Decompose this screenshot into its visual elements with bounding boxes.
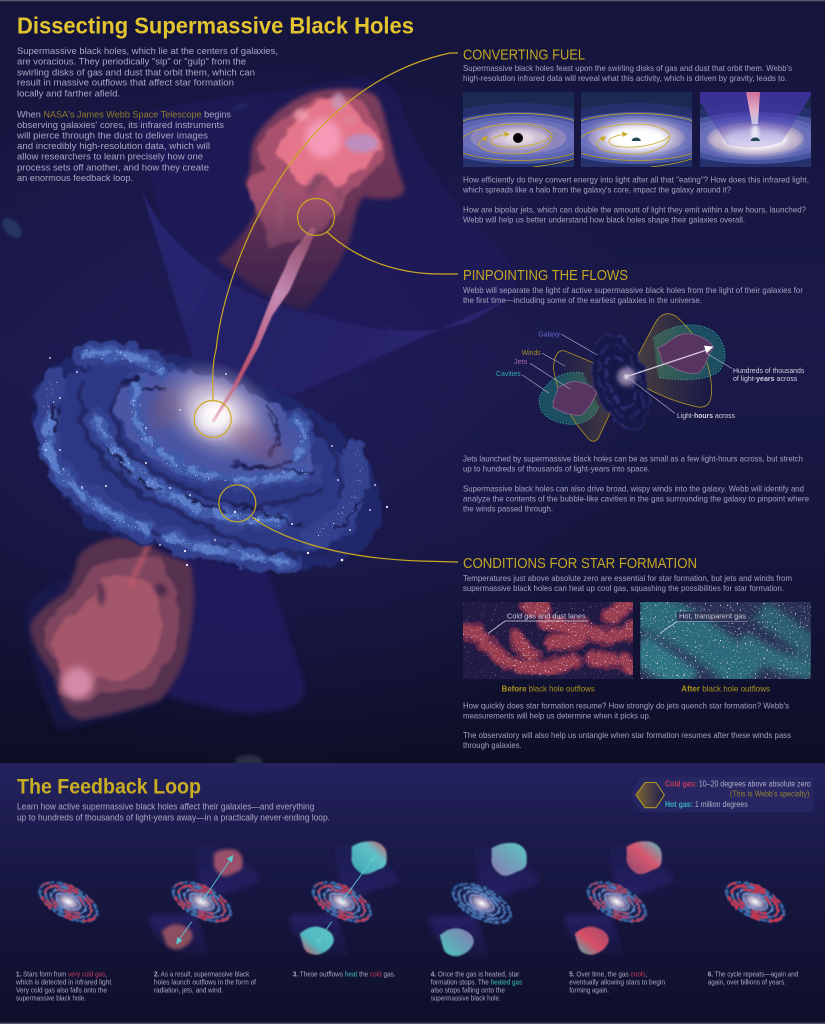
galaxy bbox=[581, 328, 660, 436]
diagram labels: Galaxy bbox=[538, 330, 560, 338]
image: before outflows bbox=[463, 602, 633, 679]
galaxy outer disk bbox=[32, 348, 382, 571]
intro text: When NASA's James Webb Space Telescope begins bbox=[17, 109, 231, 119]
caption: step 6: 6. The cycle repeats—again and bbox=[708, 970, 798, 979]
diagram labels: Cavities bbox=[496, 369, 521, 378]
text: pinpointing explanation: Supermassive black holes can also drive broad, wispy winds into the galaxy. Webb will identify and bbox=[463, 483, 804, 493]
panel: top outflow cavity bbox=[135, 78, 515, 419]
top jet bbox=[212, 226, 316, 422]
text: converting fuel intro: Supermassive black holes feast upon the swirling disks of gas and dust that orbit them. Webb's bbox=[463, 63, 792, 73]
text: pinpointing explanation: the winds passed through. bbox=[463, 503, 553, 513]
caption: step 5 bbox=[569, 970, 665, 994]
text: feedback intro bbox=[17, 802, 330, 822]
intro text: swirling disks of gas and dust that orbit them, which can bbox=[17, 67, 255, 77]
diagram labels: of light-years across bbox=[733, 374, 798, 383]
caption: step 1: supermassive black hole. bbox=[16, 994, 86, 1003]
arrow: size of jets bbox=[627, 346, 713, 377]
text: pinpointing intro: Webb will separate the light of active supermassive black holes from the light of their galaxies for bbox=[463, 285, 803, 295]
winds bbox=[553, 314, 712, 441]
caption: step 6 bbox=[708, 970, 798, 987]
text: pinpointing intro: the first time—including some of the earliest galaxies in the universe. bbox=[463, 295, 702, 305]
text: conditions questions: The observatory will also help us untangle when star formation resumes after these winds pass bbox=[463, 730, 791, 740]
text: pinpointing intro bbox=[463, 285, 803, 305]
step 1 galaxy bbox=[31, 872, 106, 932]
intro text: locally and farther afield. bbox=[17, 88, 120, 98]
text: conditions questions: How quickly does star formation resume? How strongly do jets quench star formation? Webb's bbox=[463, 700, 789, 710]
caption: step 4: also stops falling onto the bbox=[431, 985, 505, 994]
diagram labels: Hundreds of thousands bbox=[733, 366, 805, 375]
icon: hexagon bbox=[636, 782, 664, 808]
connector: pinpointing the flows bbox=[327, 232, 458, 274]
image: after outflows bbox=[637, 602, 814, 683]
caption: step 5: eventually allowing stars to begin bbox=[569, 978, 665, 987]
text: feedback intro: up to hundreds of thousands of light-years away—in a practically never-ending loop. bbox=[17, 812, 330, 822]
image: accretion disk bright bbox=[581, 92, 692, 167]
image: accretion disk dark bbox=[463, 92, 574, 167]
main galaxy bbox=[30, 340, 388, 574]
caption: step 6: again, over billions of years. bbox=[708, 978, 786, 987]
caption: step 1: which is detected in infrared light. bbox=[15, 978, 113, 987]
caption: step 4: supermassive black hole. bbox=[431, 994, 501, 1003]
caption: step 1 bbox=[15, 970, 113, 1003]
icon: distant small galaxies bbox=[0, 101, 395, 767]
label: hot transparent gas bbox=[660, 611, 748, 633]
diagram labels: Winds bbox=[522, 348, 541, 357]
diagram: jets, winds and cavities bbox=[496, 314, 805, 441]
text: conditions questions bbox=[463, 700, 791, 750]
caption: step 4 bbox=[431, 970, 523, 1003]
text: converting fuel questions bbox=[462, 175, 809, 224]
text: converting fuel questions: Webb will help us better understand how black holes shape their galaxies overall. bbox=[463, 214, 745, 224]
intro text: an enormous feedback loop. bbox=[17, 173, 133, 183]
legend: gas temperatures: Hot gas: 1 million degrees bbox=[665, 799, 748, 809]
caption: before: Before black hole outflows bbox=[502, 684, 595, 693]
text: converting fuel questions: How are bipolar jets, which can double the amount of light they emit within a few hours, launched? bbox=[463, 204, 806, 214]
step 6 cycle repeats bbox=[717, 872, 793, 932]
intro text: Supermassive black holes, which lie at the centers of galaxies, bbox=[17, 46, 278, 56]
heading: converting fuel: CONVERTING FUEL bbox=[463, 46, 585, 64]
legend: gas temperatures: (This is Webb's specialty) bbox=[730, 788, 809, 798]
image: accretion disk with jet bbox=[700, 92, 811, 167]
label: hot transparent gas: Hot, transparent gas bbox=[679, 611, 746, 620]
cavities bbox=[539, 325, 725, 424]
intro text: result in massive outflows that affect star formation bbox=[17, 78, 234, 88]
intro text: and incredibly high-resolution data, which will bbox=[17, 141, 210, 151]
caption: after: After black hole outflows bbox=[681, 684, 770, 693]
galaxy mid disk bbox=[43, 361, 360, 556]
caption: step 5: forming again. bbox=[569, 985, 609, 994]
label lines bbox=[522, 334, 732, 413]
jets bbox=[553, 334, 713, 415]
text: pinpointing explanation: up to hundreds of thousands of light-years into space. bbox=[463, 464, 650, 474]
text: conditions questions: measurements will help us determine when it picks up. bbox=[463, 710, 651, 720]
text: pinpointing explanation bbox=[463, 454, 809, 513]
text: converting fuel intro: high-resolution infrared data will reveal what this activity, which is driven by gravity, leads to. bbox=[463, 73, 787, 83]
intro text: allow researchers to learn precisely how one bbox=[17, 152, 203, 162]
panel: bottom outflow cone bbox=[120, 545, 305, 713]
text: conditions intro: Temperatures just above absolute zero are essential for star formation, but jets and winds from bbox=[463, 573, 792, 583]
text: feedback intro: Learn how active supermassive black holes affect their galaxies—and everything bbox=[17, 802, 314, 812]
bottom gas cloud bbox=[30, 533, 194, 720]
caption: step 2: radiation, jets, and wind. bbox=[154, 985, 223, 994]
intro text: process sets off another, and how they create bbox=[17, 162, 209, 172]
top gas cloud bbox=[217, 88, 405, 310]
text: pinpointing explanation: analyze the contents of the bubble-like cavities in the gas surrounding the galaxy to pinpoint where bbox=[463, 493, 809, 503]
title: Dissecting Supermassive Black Holes bbox=[17, 12, 414, 38]
galaxy star speckle bbox=[42, 348, 362, 569]
step 3 heating bbox=[290, 841, 400, 956]
step 2 outflows bbox=[150, 844, 260, 956]
galaxy dark lanes bbox=[81, 383, 340, 554]
panel: top outflow cone bbox=[140, 185, 512, 419]
connector: conditions for star formation bbox=[252, 517, 458, 562]
caption: step 2 bbox=[154, 970, 257, 994]
caption: step 3: 3. These outflows heat the cold gas. bbox=[293, 970, 396, 979]
text: conditions intro bbox=[463, 573, 792, 593]
galaxy inner ring bbox=[116, 371, 314, 487]
step 5 cooling bbox=[565, 841, 675, 956]
caption: step 4: 4. Once the gas is heated, star bbox=[431, 970, 520, 979]
text: conditions intro: supermassive black holes can heat up cool gas, squashing the possibilities for star formation. bbox=[463, 583, 784, 593]
panel: the feedback loop bbox=[0, 763, 825, 1024]
galaxy core bbox=[617, 367, 636, 386]
label: cold gas and dust lanes: Cold gas and dust lanes bbox=[507, 611, 586, 620]
connector: converting fuel bbox=[213, 53, 458, 400]
diagram labels: Light-hours across bbox=[677, 411, 735, 420]
diagram labels bbox=[496, 330, 805, 420]
caption: step 1: Very cold gas also falls onto the bbox=[16, 985, 107, 994]
caption: step 5: 5. Over time, the gas cools, bbox=[569, 970, 647, 979]
diagram labels: Jets bbox=[514, 357, 528, 366]
galaxy broad arm bands bbox=[47, 353, 357, 563]
galaxy fine dark dust bbox=[53, 379, 360, 527]
text: converting fuel questions: How efficiently do they convert energy into light after all that "eating"? How does this infrared light, bbox=[463, 175, 809, 185]
legend: gas temperatures bbox=[630, 777, 813, 812]
label: cold gas and dust lanes bbox=[488, 611, 588, 633]
intro text: will pierce through the dust to deliver images bbox=[16, 131, 208, 141]
text: converting fuel intro bbox=[463, 63, 792, 83]
caption: step 2: holes launch outflows in the form of bbox=[154, 978, 257, 987]
text: conditions questions: through galaxies. bbox=[463, 740, 522, 750]
caption: step 2: 2. As a result, supermassive black bbox=[154, 970, 250, 979]
caption: step 4: formation stops. The heated gas bbox=[431, 978, 523, 987]
galaxy brown dust tint bbox=[144, 383, 294, 474]
heading: the feedback loop: The Feedback Loop bbox=[17, 776, 201, 798]
galaxy core bbox=[195, 406, 229, 434]
caption: step 1: 1. Stars form from very cold gas, bbox=[16, 970, 107, 979]
panel: bottom cloud shell bbox=[25, 560, 165, 730]
intro text bbox=[16, 46, 278, 183]
text: converting fuel questions: which spreads like a halo from the galaxy's core, impact the galaxy around it? bbox=[462, 185, 731, 195]
heading: pinpointing the flows: PINPOINTING THE FLOWS bbox=[463, 267, 628, 284]
galaxy bulge halo bbox=[137, 339, 299, 485]
intro text: observing galaxies' cores, its infrared instruments bbox=[17, 120, 224, 130]
heading: conditions for star formation: CONDITIONS FOR STAR FORMATION bbox=[463, 555, 697, 572]
galaxy spiral arms bbox=[47, 353, 310, 563]
intro text: are voracious. They periodically "sip" or "gulp" from the bbox=[17, 57, 246, 67]
step 4 star formation stops bbox=[430, 843, 540, 958]
text: pinpointing explanation: Jets launched by supermassive black holes can be as small as a few light-hours across, but stretch bbox=[463, 454, 803, 464]
magnifier circles bbox=[194, 198, 334, 522]
galaxy bright stars bbox=[45, 357, 388, 566]
